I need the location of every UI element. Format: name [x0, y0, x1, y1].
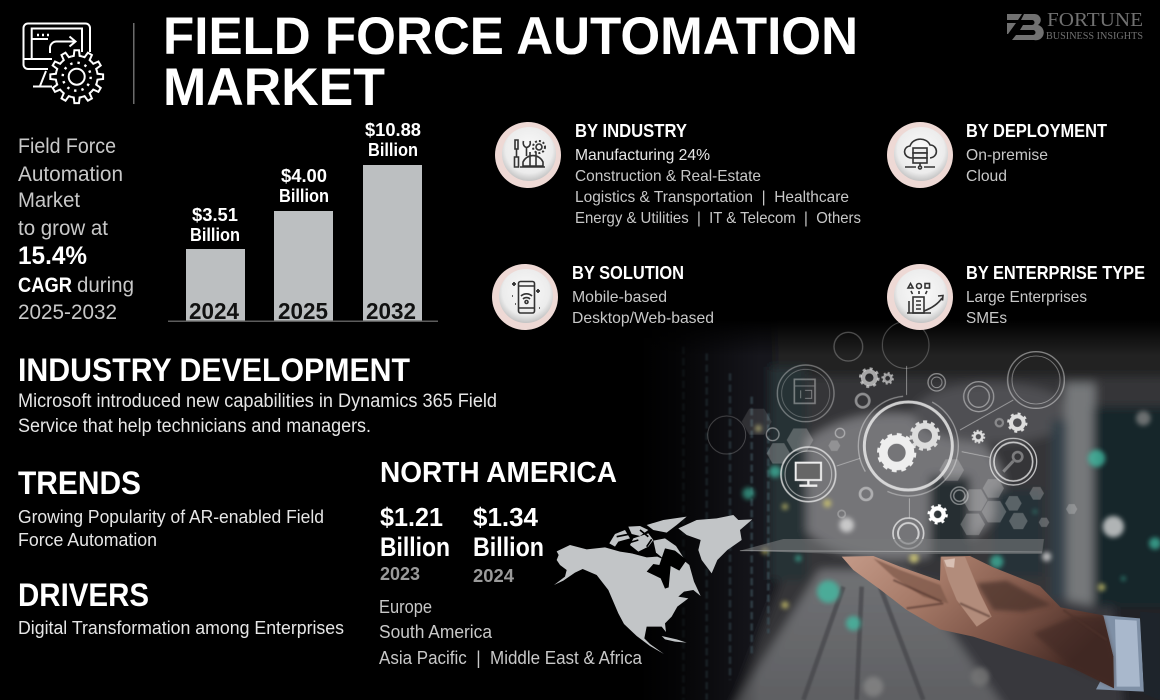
panel: trends: TRENDS — [18, 465, 141, 501]
panel: drivers: DRIVERS — [18, 577, 149, 613]
panel: by solution: Mobile-based — [572, 289, 667, 306]
panel: North America values: 2023 — [380, 564, 420, 584]
connector lines — [837, 366, 1013, 518]
icon: monitor with gear — [24, 24, 103, 103]
panel: by industry — [575, 121, 861, 227]
panel: North America values: $1.34 — [473, 502, 539, 532]
panel: by deployment: BY DEPLOYMENT — [966, 121, 1107, 141]
hand holding tablet — [842, 556, 1160, 700]
bokeh lights — [742, 411, 1160, 697]
bar chart: 2024 — [189, 298, 239, 324]
calendar circle — [777, 365, 834, 422]
bar chart: 2032 — [366, 298, 416, 324]
panel: by solution — [572, 263, 714, 327]
panel: drivers: Digital Transformation among Enterprises — [18, 618, 344, 638]
digital interface overlay: gears and network circles — [708, 322, 1160, 700]
panel: by deployment: Cloud — [966, 168, 1007, 185]
lower ring — [893, 518, 924, 549]
central gears — [879, 422, 939, 470]
panel: other regions: Asia Pacific | Middle East & Africa — [379, 648, 643, 668]
panel: by industry: BY INDUSTRY — [575, 121, 687, 141]
floor stripes — [803, 587, 923, 700]
icon: by enterprise type — [887, 264, 953, 330]
CAGR text block: 2025-2032 — [18, 301, 117, 324]
photo fade to black, left — [640, 320, 760, 700]
logo: Fortune Business Insights: BUSINESS INSIGHTS — [1046, 31, 1143, 42]
CAGR text block: to grow at — [18, 217, 108, 240]
icon: by deployment — [887, 122, 953, 188]
CAGR text block: Market — [18, 189, 80, 212]
icon: by solution — [492, 264, 558, 330]
photo: server room corridor — [681, 329, 1160, 700]
panel: by solution: BY SOLUTION — [572, 263, 684, 283]
panel: industry development — [18, 352, 497, 437]
bar chart: $3.51 — [192, 205, 238, 225]
panel: by enterprise type: Large Enterprises — [966, 289, 1087, 306]
divider — [133, 23, 134, 104]
panel: by enterprise type — [966, 263, 1145, 327]
panel: industry development: INDUSTRY DEVELOPMENT — [18, 352, 410, 388]
panel: by industry: Manufacturing 24% — [575, 147, 710, 164]
CAGR text block — [18, 135, 134, 324]
tablet — [740, 539, 1044, 554]
surrounding rings — [708, 322, 1064, 504]
rack stripes — [683, 347, 768, 700]
panel: North America values: Billion — [473, 532, 544, 562]
bar chart: Billion — [190, 225, 240, 245]
CAGR text block: during — [77, 274, 134, 297]
CAGR text block: Field Force — [18, 135, 116, 158]
CAGR text block: CAGR — [18, 274, 72, 297]
monitor circle — [781, 447, 836, 502]
bar chart: $4.00 — [281, 166, 327, 186]
panel: by enterprise type: SMEs — [966, 310, 1007, 327]
bar chart: $10.88 — [365, 120, 421, 140]
panel: other regions: Europe — [379, 597, 432, 617]
panel: North America values — [380, 457, 617, 586]
panel: by industry: Energy & Utilities | IT & Telecom | Others — [575, 210, 861, 227]
icon: by industry — [495, 122, 561, 188]
hexagons — [742, 409, 1077, 535]
panel: by industry: Logistics & Transportation | Healthcare — [575, 189, 849, 206]
bar chart — [168, 120, 438, 324]
panel: by deployment: On-premise — [966, 147, 1048, 164]
bar chart: Billion — [279, 186, 329, 206]
panel: by deployment — [966, 121, 1107, 185]
panel: by solution: Desktop/Web-based — [572, 310, 714, 327]
panel: by enterprise type: BY ENTERPRISE TYPE — [966, 263, 1145, 283]
title — [163, 7, 858, 117]
small gears — [838, 369, 1026, 523]
logo: Fortune Business Insights: FORTUNE — [1047, 9, 1143, 31]
panel: trends — [18, 465, 324, 550]
panel: drivers — [18, 577, 344, 638]
panel: industry development: Microsoft introduced new capabilities in Dynamics 365 Field — [18, 391, 497, 412]
map: North America — [554, 515, 752, 654]
panel: trends: Force Automation — [18, 530, 157, 550]
CAGR text block: Automation — [18, 163, 123, 186]
bar chart: Billion — [368, 140, 418, 160]
logo: Fortune Business Insights — [1007, 9, 1143, 42]
panel: North America values: NORTH AMERICA — [380, 457, 617, 489]
photo fade to black, top — [688, 320, 1160, 347]
panel: North America values: $1.21 — [380, 502, 443, 532]
bar chart: 2025 — [278, 298, 328, 324]
panel: North America values: 2024 — [473, 566, 514, 586]
title: FIELD FORCE AUTOMATION — [163, 7, 858, 66]
panel: other regions — [379, 597, 643, 668]
panel: North America values: Billion — [380, 532, 450, 562]
main gear circle — [858, 396, 958, 496]
panel: trends: Growing Popularity of AR-enabled Field — [18, 507, 324, 527]
panel: by industry: Construction & Real-Estate — [575, 168, 761, 185]
title: MARKET — [163, 58, 385, 117]
panel: industry development: Service that help technicians and managers. — [18, 416, 371, 437]
CAGR text block: 15.4% — [18, 242, 87, 270]
panel: other regions: South America — [379, 622, 493, 642]
key circle — [990, 438, 1037, 485]
